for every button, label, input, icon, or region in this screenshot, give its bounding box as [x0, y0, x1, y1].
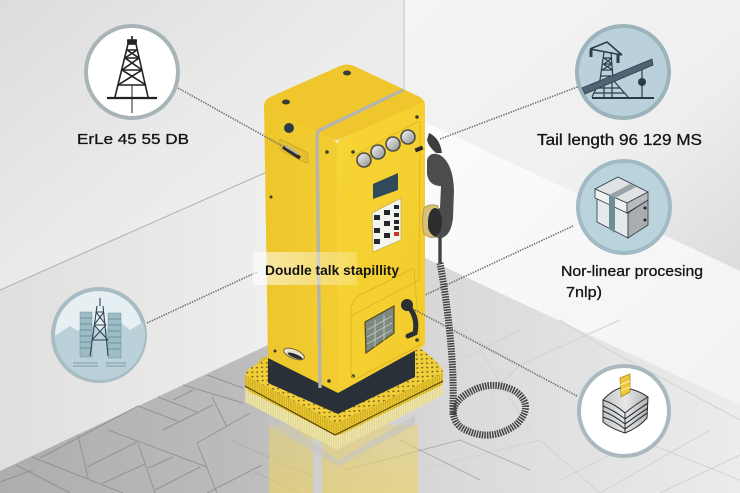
silver indicator buttons [357, 130, 415, 167]
heading: tail length: Tail length 96 129 MS [537, 132, 702, 149]
heading: ERLE: ErLe 45 55 DB [77, 131, 189, 148]
card slot [280, 139, 308, 163]
metal label plate [365, 306, 394, 353]
icon: crane tower [577, 26, 669, 118]
label: double talk stability: Doudle talk stapillity [265, 262, 399, 278]
icon: oil derrick [86, 26, 178, 118]
label: double talk stability [253, 252, 399, 285]
telephone handset [422, 133, 454, 238]
dark plinth [268, 347, 415, 414]
keypad [372, 198, 401, 252]
kiosk left face [264, 104, 338, 393]
kiosk top face [264, 64, 425, 140]
sub-heading: nlp: 7nlp) [566, 284, 602, 301]
icon: layered stack with card [579, 366, 669, 456]
kiosk right face [337, 102, 425, 393]
hook handle [401, 299, 416, 336]
metal strap [317, 90, 403, 388]
dotted connector lines [147, 86, 580, 396]
perforated base plate [245, 326, 443, 435]
coiled phone cord [440, 237, 526, 435]
display screen [373, 173, 398, 199]
top screws and side hole [269, 70, 419, 383]
yellow kiosk telephone unit [245, 64, 443, 435]
icon: box module [578, 161, 670, 253]
lower slot [282, 346, 306, 362]
reflection of kiosk on floor [245, 382, 443, 493]
icon: derrick with city skyline [53, 289, 145, 381]
panel outlines [351, 121, 420, 378]
heading: non-linear processing: Nor-linear procesing [561, 263, 703, 280]
